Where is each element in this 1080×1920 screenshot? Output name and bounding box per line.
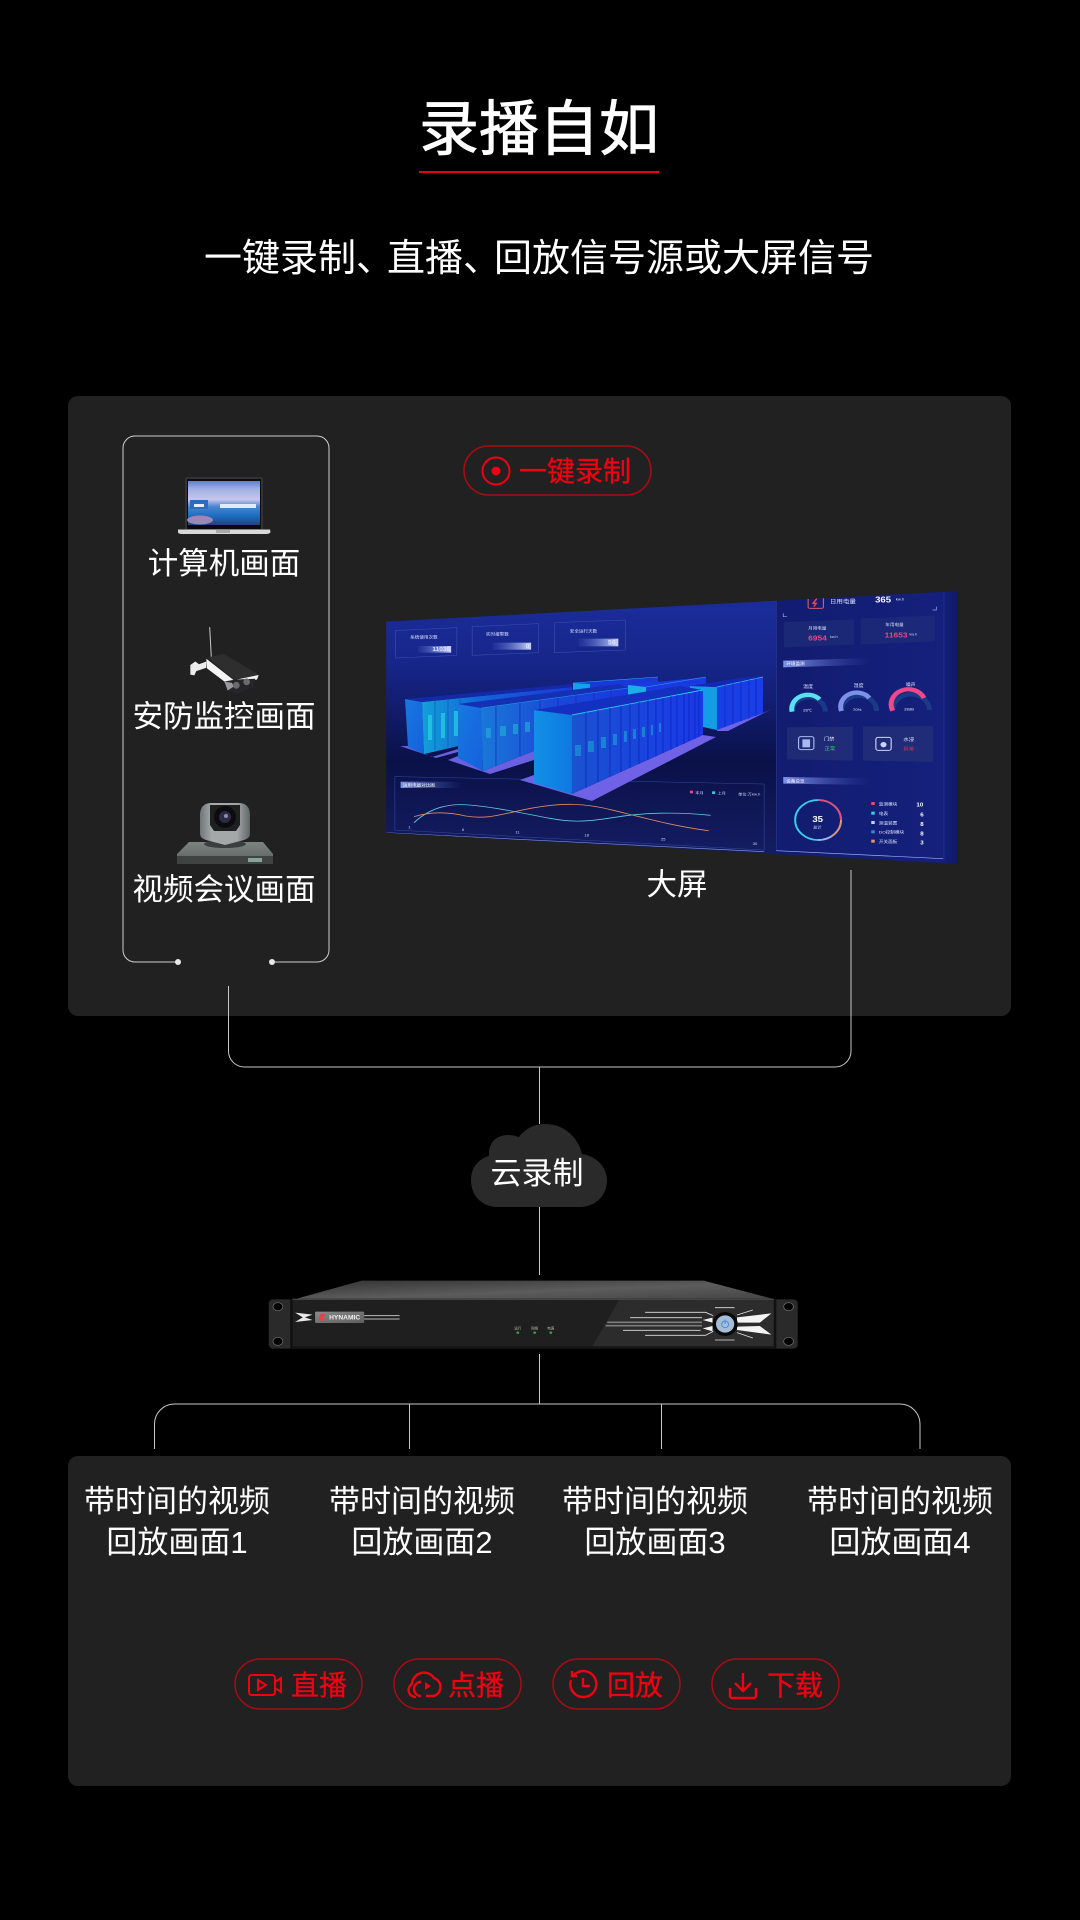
big screen dashboard: 安全运行天数 [570,628,598,634]
back rack b [658,677,706,690]
big screen dashboard: 门禁 [824,736,835,743]
big screen dashboard: kw.h [896,597,904,602]
label: cloud recording: 云录制 [490,1156,584,1191]
big screen dashboard: 30 [753,841,758,846]
big screen dashboard: 56 [608,640,616,647]
one-key record button [463,445,652,496]
big screen dashboard: 日用电量 [830,598,856,605]
label: big screen: 大屏 [646,868,708,902]
label: conference: 视频会议画面 [132,873,316,907]
gauges [803,681,916,712]
gauges: 70% [853,707,862,712]
big screen dashboard: 8 [920,822,925,828]
recording device: 运行 [514,1325,522,1330]
big screen dashboard: 上月 [717,791,726,795]
big screen dashboard [386,591,958,864]
output label 1 [84,1484,270,1560]
button: download [711,1658,840,1710]
big screen dashboard: 3 [920,841,924,847]
big screen dashboard: 6954 [808,634,827,642]
big screen dashboard: 1 [408,825,411,830]
right top [808,598,824,609]
output label 3 [562,1484,748,1560]
big screen dashboard: 电表 [879,810,889,817]
big screen dashboard: DO控制模块 [879,829,905,836]
output label 4: 回放画面4 [829,1525,971,1560]
recording device: HYNAMIC [329,1315,361,1322]
button: playback [552,1658,681,1710]
big screen dashboard: 月用电量 [808,625,827,631]
icon: laptop [178,477,270,534]
server racks in page coordinates [400,676,772,801]
big screen dashboard: 0 [526,643,530,650]
button: on demand: 点播 [448,1670,504,1701]
output label 2 [329,1484,515,1560]
big screen dashboard: kw.h [830,635,838,639]
gauges: 28dB [904,707,914,711]
title: 录播自如 [419,96,659,163]
label: security: 安防监控画面 [132,700,316,734]
button: playback: 回放 [607,1670,663,1701]
output label 2: 带时间的视频 [329,1484,515,1519]
big screen dashboard: 年用电量 [885,621,905,628]
gauges: 湿度 [854,682,864,689]
big screen dashboard: 35 [812,815,823,824]
panel: sources and big screen [68,396,1011,1016]
big screen dashboard: 总计 [813,825,822,830]
output label 1: 带时间的视频 [84,1484,270,1519]
source list frame [122,436,330,965]
gauges: 温度 [803,683,813,690]
big screen dashboard: 测温装置 [879,820,898,826]
big screen dashboard: 设备总览 [786,778,805,784]
big screen dashboard: 单位:万kw.h [738,792,760,796]
big screen dashboard: 6 [462,827,465,832]
big screen dashboard: 实时报警数 [486,631,510,638]
big screen dashboard: 本月 [695,790,704,795]
rack 4 [690,686,717,730]
button: on demand [393,1658,522,1710]
icon: security camera [190,627,259,694]
big screen dashboard: 环境监测 [786,660,805,667]
big screen dashboard: 25 [661,837,666,842]
donut [795,800,841,840]
chart frame [395,777,764,850]
icon: conference camera [177,803,273,864]
big screen dashboard: 开关面板 [879,838,898,845]
KPI boxes [396,620,625,658]
floors [400,746,458,758]
big screen dashboard: 11653 [885,631,908,639]
big screen dashboard: 18 [584,833,590,838]
recording device: 网络 [531,1325,539,1330]
gauges: 28℃ [803,708,812,712]
back rack a [574,677,658,688]
button: live [234,1658,363,1710]
rack 3 [534,710,572,794]
recording device [268,1280,798,1349]
big screen dashboard: 6 [920,813,924,819]
recording device: 电源 [547,1325,555,1330]
big screen dashboard: 365 [875,595,891,605]
icon: cloud [471,1124,607,1207]
gauges: 噪声 [906,681,916,688]
title underline [419,171,659,173]
label: computer: 计算机画面 [148,547,300,581]
output label 1: 回放画面1 [106,1525,248,1560]
big screen dashboard: kw.h [910,633,917,636]
output label 2: 回放画面2 [351,1525,493,1560]
big screen dashboard: 异常 [903,746,914,752]
one-key record button: 一键录制 [519,456,631,487]
rack 1 [405,699,424,754]
big screen dashboard: 运用电量对比图 [403,782,435,789]
output label 3: 带时间的视频 [562,1484,748,1519]
big screen dashboard: 8 [920,832,925,837]
panel: playback outputs [68,1456,1011,1786]
big screen dashboard: 系统使用次数 [410,634,438,641]
line chart [401,782,462,788]
button: download: 下载 [767,1670,823,1701]
button: live: 直播 [291,1670,347,1701]
subtitle: 一键录制、直播、回放信号源或大屏信号 [204,238,874,280]
output label 4 [807,1484,993,1560]
output label 3: 回放画面3 [584,1525,726,1560]
big screen dashboard: 水浸 [903,736,914,743]
big screen dashboard: 11036 [432,646,451,653]
big screen dashboard: 11 [515,830,520,834]
output label 4: 带时间的视频 [807,1484,993,1519]
big screen dashboard: 正常 [825,745,835,752]
rack 2 [458,704,483,771]
big screen dashboard: 监测模块 [879,801,898,807]
big screen dashboard: 10 [916,803,923,809]
